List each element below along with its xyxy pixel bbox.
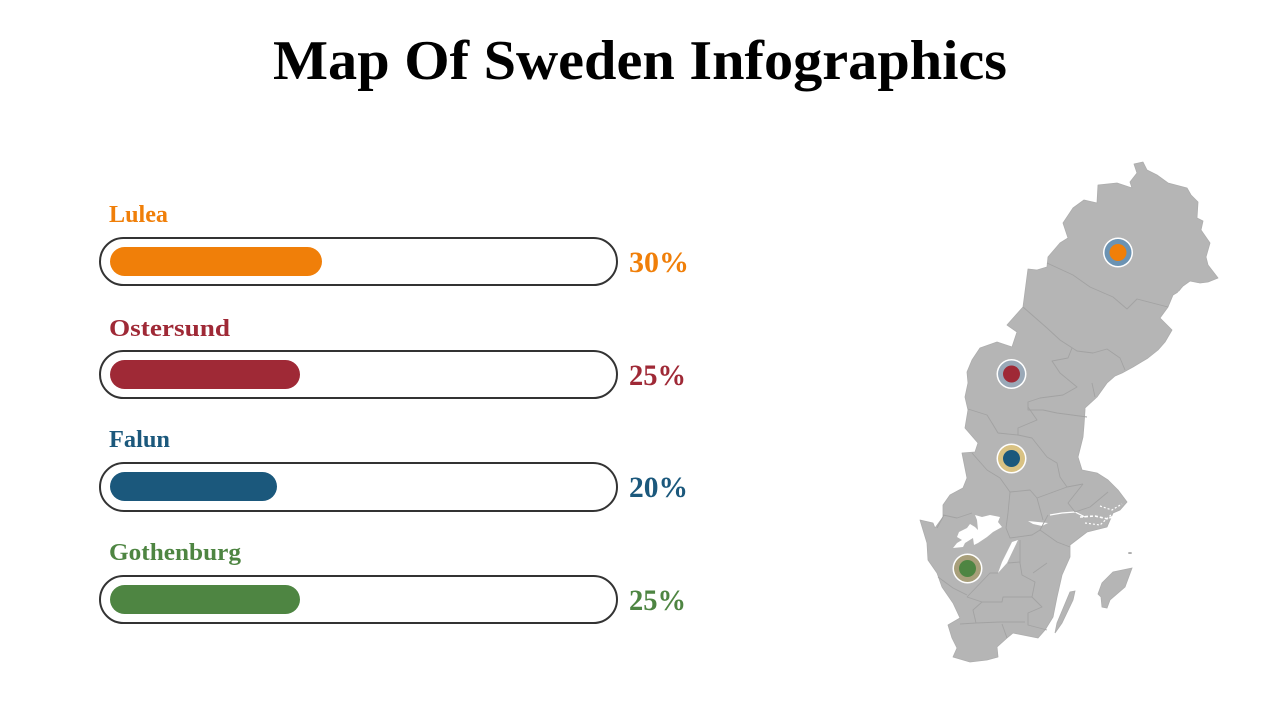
label: Ostersund: Ostersund [109,316,231,342]
bar fill: Gothenburg 25% [110,585,300,614]
region borders [937,263,1168,638]
value: Falun 20%: 20% [629,471,688,504]
title: Map Of Sweden Infographics [273,30,1007,92]
island: Gotland [1098,568,1132,608]
panel: Gothenburg bar row [100,540,686,623]
bar track: Gothenburg [100,576,617,623]
small island [1128,552,1132,554]
marker: Falun [996,444,1026,474]
label: Gothenburg: Gothenburg [109,540,241,566]
value: Lulea 30%: 30% [629,246,689,279]
marker: Lulea [1103,238,1133,268]
value: Ostersund 25%: 25% [629,359,686,392]
bar track: Lulea [100,238,617,285]
lake: Malaren [1028,521,1048,526]
panel: Lulea bar row [100,202,689,285]
map of Sweden [920,162,1218,662]
mainland outline [920,162,1218,662]
bar fill: Ostersund 25% [110,360,300,389]
bar track: Ostersund [100,351,617,398]
panel: Ostersund bar row [100,316,686,398]
archipelago gaps [1050,284,1205,525]
label: Falun: Falun [109,427,170,453]
marker: Gothenburg [952,554,982,584]
bar fill: Lulea 30% [110,247,322,276]
bar fill: Falun 20% [110,472,277,501]
lake: Vattern [998,540,1018,573]
island: Oland [1055,591,1075,633]
lakes [953,515,1048,573]
bar track: Falun [100,463,617,511]
lake: Vanern [953,515,1002,548]
label: Lulea: Lulea [109,202,168,228]
panel: Falun bar row [100,427,688,511]
marker: Ostersund [996,359,1026,389]
value: Gothenburg 25%: 25% [629,584,686,617]
